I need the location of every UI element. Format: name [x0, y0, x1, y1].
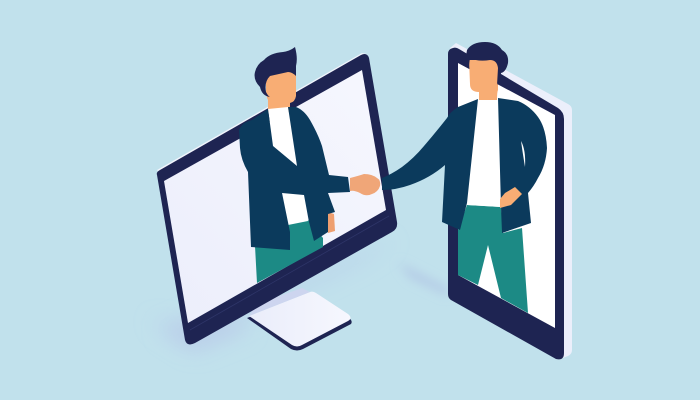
hair: [466, 42, 508, 85]
man in monitor: [239, 47, 380, 283]
monitor: [157, 53, 397, 344]
jacket left side and arm: [382, 99, 478, 230]
hand on hip: [500, 187, 522, 208]
phone side: [450, 43, 572, 359]
shaking hands: [350, 174, 380, 195]
monitor stand: [247, 288, 352, 350]
monitor highlight: [157, 53, 367, 174]
phone body: [448, 48, 564, 359]
monitor screen: [164, 70, 386, 323]
arm gap: [521, 141, 525, 167]
pants: [255, 220, 323, 283]
phone screen: [458, 63, 555, 328]
upper tee: [268, 107, 297, 166]
man in phone: [382, 42, 547, 313]
monitor chin line: [190, 216, 389, 330]
jacket: [239, 107, 350, 250]
lower tee: [282, 190, 308, 225]
monitor body: [157, 54, 397, 344]
pants: [458, 205, 528, 313]
jacket right side: [498, 98, 547, 233]
floor shadows: [150, 240, 448, 352]
left hand at pocket: [328, 212, 335, 233]
hair: [255, 47, 297, 97]
neck and face: [469, 60, 498, 100]
smartphone: [448, 43, 572, 359]
tee: [467, 97, 501, 207]
neck and face: [266, 70, 296, 112]
